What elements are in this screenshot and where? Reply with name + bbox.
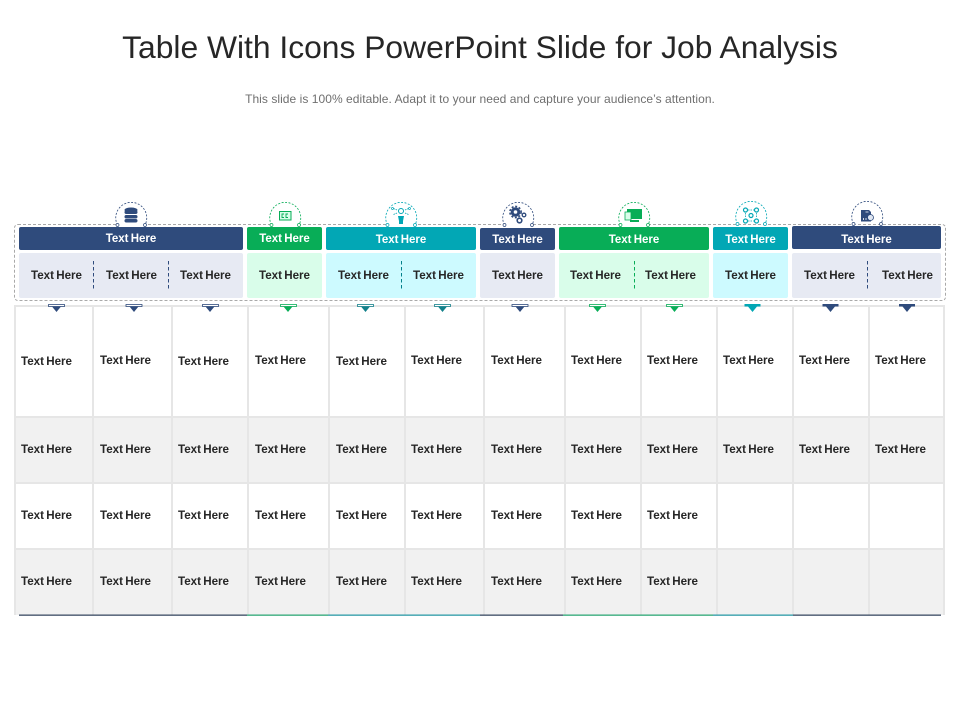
table row 2: Text Here bbox=[255, 443, 306, 456]
column group 4 subheader bbox=[480, 253, 555, 298]
table row 4: Text Here bbox=[100, 575, 151, 588]
table row 2: Text Here bbox=[723, 443, 774, 456]
subheader labels: Text Here bbox=[882, 269, 933, 282]
column group 4 header bbox=[480, 228, 555, 250]
subheader labels: Text Here bbox=[180, 269, 231, 282]
table row 1: Text Here bbox=[571, 354, 622, 367]
table row 1: Text Here bbox=[411, 354, 462, 367]
table row 3: Text Here bbox=[571, 509, 622, 522]
dashed header container bbox=[14, 224, 946, 301]
column group 7 subheader bbox=[792, 253, 941, 298]
column group 1 subheader bbox=[19, 253, 243, 298]
subheader labels: Text Here bbox=[338, 269, 389, 282]
table row 2: Text Here bbox=[21, 443, 72, 456]
table row 4 bbox=[21, 575, 698, 588]
table row 4: Text Here bbox=[491, 575, 542, 588]
table row 1: Text Here bbox=[799, 354, 850, 367]
column group 5 header bbox=[559, 227, 709, 250]
table row 1: Text Here bbox=[491, 354, 542, 367]
column group 7 header bbox=[792, 226, 941, 249]
column group 6 header: Text Here bbox=[725, 234, 776, 246]
table row 1: Text Here bbox=[723, 354, 774, 367]
subheader labels: Text Here bbox=[804, 269, 855, 282]
table row 1: Text Here bbox=[100, 354, 151, 367]
table grid bbox=[14, 305, 945, 615]
column marker arrows bbox=[48, 304, 915, 312]
icon: database bbox=[115, 202, 148, 227]
column group 3 subheader bbox=[326, 253, 476, 298]
column group 3 header bbox=[326, 227, 476, 250]
icon: monitor bbox=[618, 202, 650, 227]
table row 2: Text Here bbox=[100, 443, 151, 456]
icon: idea person bbox=[385, 202, 418, 227]
column group 1 header: Text Here bbox=[106, 233, 156, 245]
table row 2: Text Here bbox=[875, 443, 926, 456]
subheader labels: Text Here bbox=[31, 269, 82, 282]
subheader labels: Text Here bbox=[492, 269, 543, 282]
table row 3: Text Here bbox=[255, 509, 306, 522]
table row 3: Text Here bbox=[178, 509, 229, 522]
subheader labels bbox=[31, 269, 933, 282]
column group 2 subheader bbox=[247, 253, 322, 298]
icon: network nodes bbox=[735, 201, 768, 226]
table row 3: Text Here bbox=[336, 509, 387, 522]
bottom colored rule bbox=[19, 614, 941, 616]
icon: report document bbox=[851, 201, 884, 226]
table row 4: Text Here bbox=[571, 575, 622, 588]
table row 4: Text Here bbox=[336, 575, 387, 588]
table row 4: Text Here bbox=[411, 575, 462, 588]
icon: certificate bbox=[269, 202, 302, 227]
table row 3: Text Here bbox=[491, 509, 542, 522]
table row 4: Text Here bbox=[255, 575, 306, 588]
dashed dividers bbox=[93, 261, 868, 288]
table row 3 bbox=[21, 509, 698, 522]
column group 5 header: Text Here bbox=[609, 234, 659, 246]
table row 4: Text Here bbox=[21, 575, 72, 588]
column group 2 header bbox=[247, 227, 322, 250]
subheader labels: Text Here bbox=[106, 269, 157, 282]
column group 1 header bbox=[19, 227, 243, 250]
subheader labels: Text Here bbox=[570, 269, 621, 282]
table row 4: Text Here bbox=[178, 575, 229, 588]
table row 2: Text Here bbox=[799, 443, 850, 456]
column group 4 header: Text Here bbox=[492, 234, 543, 246]
table row 1 bbox=[21, 354, 926, 368]
column group 5 subheader bbox=[559, 253, 709, 298]
table row 1: Text Here bbox=[875, 354, 926, 367]
subtitle: This slide is 100% editable. Adapt it to your need and capture your audience’s attention. bbox=[245, 92, 715, 106]
icon: gears bbox=[502, 202, 534, 227]
column group 6 header bbox=[713, 227, 788, 250]
table row 2: Text Here bbox=[647, 443, 698, 456]
subheader labels: Text Here bbox=[413, 269, 464, 282]
subheader labels: Text Here bbox=[645, 269, 696, 282]
table row 1: Text Here bbox=[178, 355, 229, 368]
table row 2: Text Here bbox=[491, 443, 542, 456]
table row 1: Text Here bbox=[336, 355, 387, 368]
table row 1: Text Here bbox=[255, 354, 306, 367]
table row 3: Text Here bbox=[647, 509, 698, 522]
table row 1: Text Here bbox=[21, 355, 72, 368]
table row 4: Text Here bbox=[647, 575, 698, 588]
table row 2 bbox=[21, 443, 926, 456]
table row 3: Text Here bbox=[100, 509, 151, 522]
title: Table With Icons PowerPoint Slide for Job Analysis bbox=[122, 29, 838, 65]
column group 3 header: Text Here bbox=[376, 234, 426, 246]
table row 2: Text Here bbox=[411, 443, 462, 456]
subheader labels: Text Here bbox=[259, 269, 310, 282]
table row 2: Text Here bbox=[336, 443, 387, 456]
column group 6 subheader bbox=[713, 253, 788, 298]
subheader labels: Text Here bbox=[725, 269, 776, 282]
column group 2 header: Text Here bbox=[259, 233, 310, 245]
table row 3: Text Here bbox=[411, 509, 462, 522]
table row 2: Text Here bbox=[571, 443, 622, 456]
table row 3: Text Here bbox=[21, 509, 72, 522]
column group 7 header: Text Here bbox=[841, 234, 892, 246]
table row 1: Text Here bbox=[647, 354, 698, 367]
table row 2: Text Here bbox=[178, 443, 229, 456]
